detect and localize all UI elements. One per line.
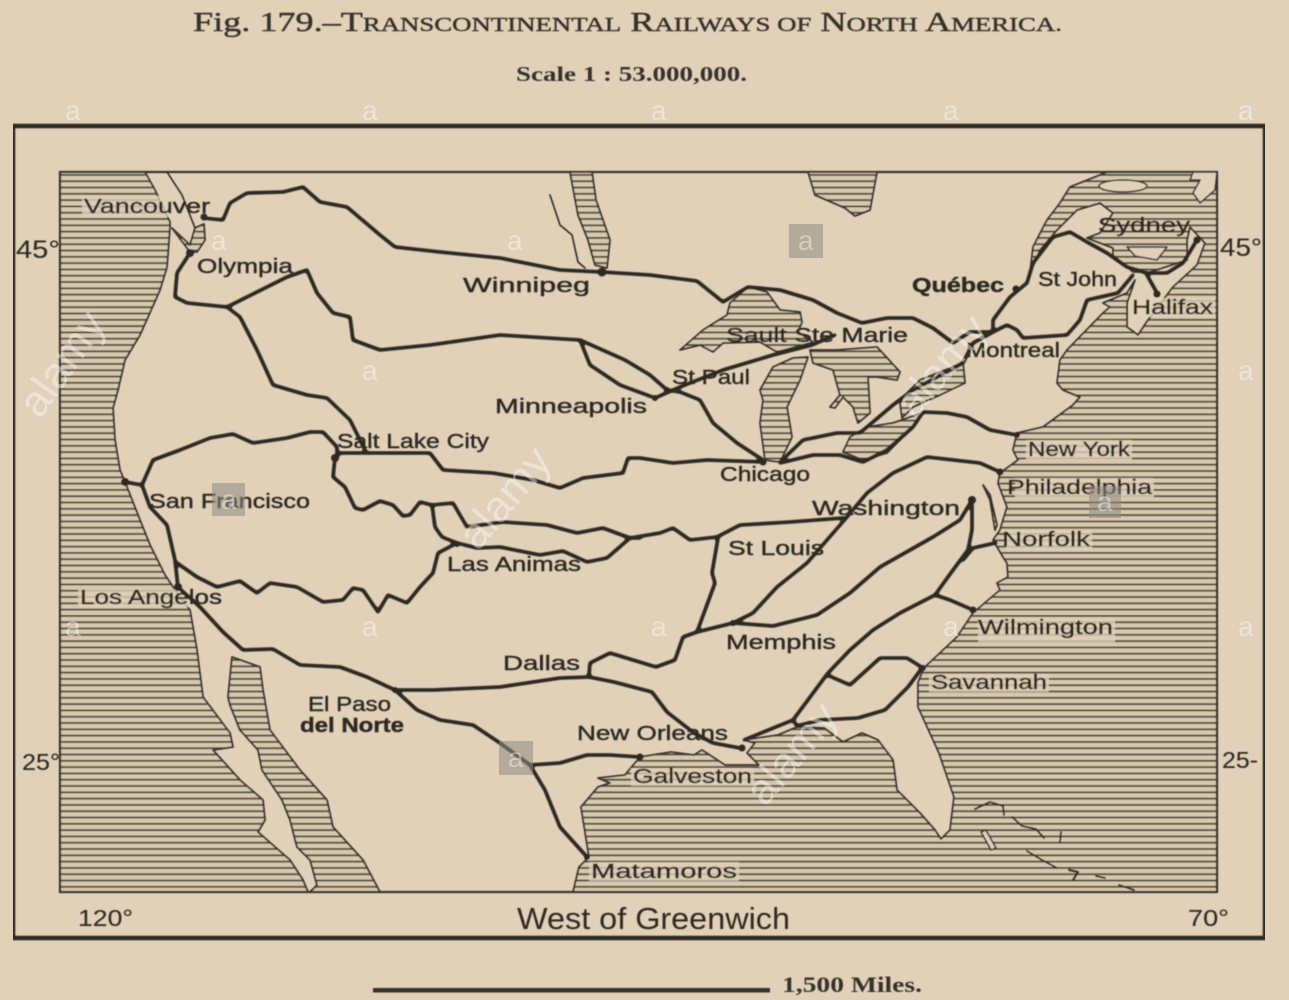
rail: Memphis to Philadelphia diagonal [733, 457, 1000, 623]
watermark letters: a [507, 225, 523, 256]
Vancouver strait [172, 224, 205, 252]
label: New Orleans: New Orleans [577, 723, 728, 745]
longitude label 120: 120° [78, 905, 133, 931]
alamy marks: alamy [448, 437, 561, 558]
map border [60, 172, 1217, 892]
rail: Dallas through Memphis to Washington [589, 500, 972, 675]
rail: Olympia line to Salt Lake City [227, 307, 366, 452]
label: West of Greenwich: West of Greenwich [517, 901, 790, 936]
alamy marks: alamy [735, 693, 848, 814]
label: El Paso del Norte: El Paso [308, 694, 391, 716]
Newfoundland [1190, 172, 1217, 203]
Chesapeake Bay [983, 485, 997, 530]
rail: Savannah to Gulf [793, 668, 922, 726]
rail: St Paul to Sault Ste Marie [655, 335, 835, 398]
watermark letters: a [362, 611, 378, 642]
rail: Salt Lake City to Chicago [335, 453, 765, 488]
label: Las Animas: Las Animas [447, 554, 581, 576]
label: Montreal: Montreal [966, 340, 1060, 362]
rail: fork to Minneapolis [580, 340, 655, 398]
watermark letters: a [651, 611, 667, 642]
railway lines [125, 187, 1197, 857]
rail: to Matamoros [530, 765, 587, 857]
city labels [80, 196, 1213, 883]
label: Galveston: Galveston [633, 766, 752, 788]
watermark letters: a [943, 611, 959, 642]
rail: Olympia branch east to St Paul [227, 270, 667, 390]
Lake Ontario [900, 363, 965, 418]
watermark tiles [212, 224, 1121, 775]
rail: Minneapolis to Chicago [667, 390, 763, 460]
scale subtitle: Scale 1 : 53.000,000. [516, 62, 747, 86]
label: Savannah: Savannah [931, 672, 1047, 694]
rail: Olympia to Portland junction [175, 253, 227, 307]
scale bar label: 1,500 Miles. [782, 972, 922, 997]
rail: Dallas to New Orleans [589, 677, 740, 748]
label: New York: New York [1028, 439, 1131, 461]
label: El Paso del Norte: del Norte [300, 715, 404, 737]
rail: Chicago to New York [780, 412, 1017, 463]
Lake Manitoba [550, 195, 585, 268]
watermark letters: a [508, 742, 524, 773]
watermark letters [65, 95, 1254, 773]
rail: Chicago to Montreal [780, 332, 993, 462]
latitude label left 45: 45° [16, 236, 60, 264]
label: Washington: Washington [812, 498, 960, 520]
watermark letters: a [362, 355, 378, 386]
Prince Edward Island [1127, 247, 1167, 260]
label: Vancouver: Vancouver [84, 196, 210, 218]
rail: Canadian Pacific, Vancouver to Montreal [203, 187, 993, 343]
Lake Superior [680, 287, 813, 352]
rail: Denver branch east [432, 503, 843, 540]
label: St Louis: St Louis [728, 538, 824, 560]
label: Chicago: Chicago [720, 464, 810, 486]
Lake Michigan [760, 357, 808, 462]
rail: El Paso to Galveston [395, 690, 640, 765]
city dots [121, 214, 1200, 860]
watermark letters: a [362, 95, 378, 126]
hatch clearing behind labels on the sea [78, 196, 1215, 881]
label: St Paul: St Paul [672, 367, 750, 389]
rail: southern line to Las Animas [177, 543, 457, 612]
label: St John: St John [1038, 269, 1117, 291]
stock watermarks [8, 95, 1254, 814]
sea: Atlantic Ocean and Gulf of Mexico [573, 172, 1217, 892]
label: Olympia: Olympia [197, 256, 294, 278]
map area [60, 172, 1217, 892]
sea: Gulf of California [228, 657, 380, 892]
latitude label right 45: 45° [1220, 234, 1262, 262]
alamy marks: alamy [885, 305, 998, 426]
scale bar [373, 988, 770, 992]
label: Winnipeg: Winnipeg [463, 275, 590, 297]
label: Memphis: Memphis [726, 632, 836, 654]
watermark letters: a [651, 95, 667, 126]
Lake Erie [843, 413, 922, 460]
longitude label 70: 70° [1188, 905, 1229, 931]
label: Quebec: Québec [912, 275, 1004, 297]
watermark letters: a [65, 95, 81, 126]
label: Sault Ste Marie: Sault Ste Marie [726, 325, 908, 347]
Vancouver Island shore [167, 172, 195, 228]
watermark letters: a [943, 95, 959, 126]
rail: Montreal to Quebec and Sydney [993, 232, 1197, 332]
latitude label left 25: 25° [22, 749, 60, 775]
label: Salt Lake City: Salt Lake City [337, 431, 489, 453]
watermark letters: a [1238, 95, 1254, 126]
label: San Francisco: San Francisco [149, 491, 310, 513]
watermark letters: a [65, 611, 81, 642]
watermark letters: a [221, 484, 237, 515]
watermark letters: a [798, 225, 814, 256]
alamy marks: alamy [8, 301, 116, 426]
alamy marks [8, 301, 998, 814]
label: Minneapolis: Minneapolis [495, 396, 647, 418]
rail: branch to Savannah [827, 658, 923, 685]
Anticosti island [1099, 180, 1147, 192]
rail: Washington to New Orleans [744, 500, 972, 740]
label: Matamoros: Matamoros [591, 861, 737, 883]
rail: Los Angeles to El Paso and Dallas [178, 587, 589, 690]
label: Norfolk: Norfolk [1002, 529, 1091, 551]
rail: St Louis to Dallas line [697, 538, 718, 632]
sea: Pacific Ocean [60, 172, 308, 892]
Lake Winnipeg [570, 172, 610, 268]
Hudson Bay inlet [808, 172, 877, 216]
Bahamas [975, 802, 1134, 890]
label: Philadelphia: Philadelphia [1007, 477, 1153, 499]
rail: branch to Halifax [1147, 275, 1157, 293]
rail: San Francisco to Los Angeles [142, 485, 178, 587]
label: Dallas: Dallas [503, 653, 580, 675]
outer map frame [13, 126, 1265, 938]
Lake Huron [810, 347, 900, 423]
label: Wilmington: Wilmington [978, 617, 1113, 639]
rail: Montreal to Saint John [993, 275, 1133, 338]
rail: San Francisco to Salt Lake City [125, 432, 337, 485]
watermark letters: a [211, 225, 227, 256]
rail: branch to Wilmington [935, 595, 973, 610]
Andros island [981, 830, 996, 850]
label: Halifax: Halifax [1132, 297, 1213, 319]
title: Fig. 179.–T RANSCONTINENTAL R AILWAYS OF N ORTH A MERICA. [193, 7, 1062, 37]
rail: branch to Norfolk [963, 543, 995, 560]
watermark letters: a [1238, 355, 1254, 386]
watermark letters: a [1097, 486, 1113, 517]
label: Sydney: Sydney [1098, 215, 1190, 237]
label: Los Angelos: Los Angelos [80, 587, 222, 609]
latitude label right 25: 25- [1222, 747, 1258, 773]
rail: Ogden to Las Animas and east [333, 458, 640, 562]
watermark letters: a [1238, 611, 1254, 642]
